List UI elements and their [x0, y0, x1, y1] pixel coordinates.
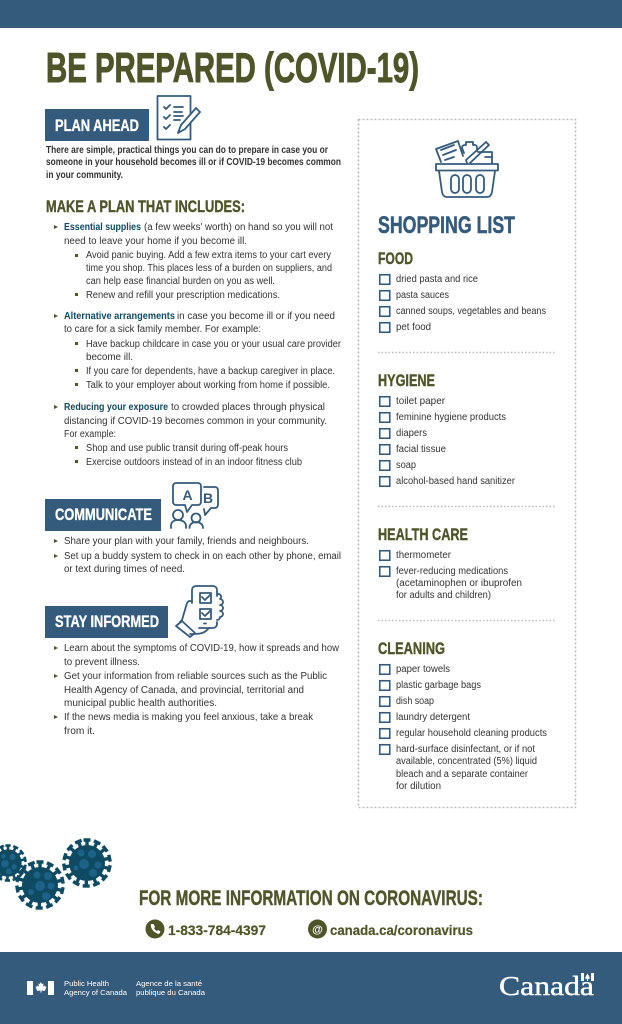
list: reducing your exposure: distancing if COVID-19 becomes common in your community.: [64, 416, 327, 427]
section: food: dried pasta and rice: [396, 274, 478, 285]
section: health care: [378, 525, 522, 601]
section: food: pet food: [396, 322, 431, 333]
heading: plan ahead: PLAN AHEAD: [55, 116, 139, 135]
icon: coronavirus particles: [0, 840, 110, 908]
section: cleaning: CLEANING: [378, 639, 445, 658]
list: communicate: Share your plan with your family, friends and neighbours.: [64, 536, 309, 547]
intro text: [46, 145, 341, 181]
logo: Canadian flag symbol: [27, 981, 54, 995]
list: essential supplies: [54, 222, 333, 301]
icon: hand holding phone: [176, 586, 223, 637]
section: cleaning: plastic garbage bags: [396, 680, 481, 691]
section: cleaning: laundry detergent: [396, 712, 470, 723]
section: food: [378, 249, 546, 333]
section: health care: (acetaminophen or ibuprofen: [396, 578, 522, 589]
list: stay informed: If the news media is making you feel anxious, take a break: [64, 712, 314, 723]
list: communicate: [54, 536, 341, 575]
icon: checklist and pencil: [158, 96, 200, 140]
list: stay informed: Get your information from reliable sources such as the Public: [64, 671, 327, 682]
intro text: in your community.: [46, 170, 123, 181]
section: cleaning: hard-surface disinfectant, or if not: [396, 744, 535, 755]
icon: two people talking: A: [182, 487, 193, 503]
panel: communicate: [45, 483, 341, 575]
list: reducing your exposure: [54, 402, 327, 468]
list: alternative arrangements: Have backup childcare in case you or your usual care provider: [86, 339, 342, 350]
list: alternative arrangements: Alternative arrangements: [64, 311, 175, 322]
section: health care: thermometer: [396, 550, 452, 561]
section: hygiene: diapers: [396, 428, 427, 439]
section: health care: HEALTH CARE: [378, 525, 468, 544]
list: communicate: or text during times of need.: [64, 564, 185, 575]
list: essential supplies: Renew and refill your prescription medications.: [86, 290, 280, 301]
section: cleaning: [378, 639, 547, 792]
list: essential supplies: time you shop. This places less of a burden on suppliers, and: [86, 263, 332, 274]
list: alternative arrangements: in case you become ill or if you need: [177, 311, 335, 322]
list: alternative arrangements: Talk to your employer about working from home if possible.: [86, 380, 330, 391]
section: hygiene: alcohol-based hand sanitizer: [396, 476, 516, 487]
section: health care: for adults and children): [396, 590, 491, 601]
heading: plan ahead: [45, 109, 149, 141]
heading: shopping list: SHOPPING LIST: [378, 212, 515, 239]
section: food: pasta sauces: [396, 290, 449, 301]
text: agency names: Agency of Canada: [64, 988, 128, 997]
intro text: There are simple, practical things you can do to prepare in case you or: [46, 145, 328, 156]
list: essential supplies: need to leave your home if you become ill.: [64, 236, 247, 247]
heading: communicate: COMMUNICATE: [55, 505, 152, 524]
text: agency names: publique du Canada: [136, 988, 206, 997]
top banner: [0, 0, 622, 28]
heading: make a plan: MAKE A PLAN THAT INCLUDES:: [46, 197, 245, 216]
section: food: FOOD: [378, 249, 413, 268]
section: food: canned soups, vegetables and beans: [396, 306, 546, 317]
icon: two people talking: B: [203, 490, 213, 506]
list: stay informed: [54, 643, 340, 737]
heading: communicate: [45, 499, 161, 531]
list: reducing your exposure: Exercise outdoors instead of in an indoor fitness club: [86, 457, 302, 468]
list: reducing your exposure: Shop and use public transit during off-peak hours: [86, 443, 288, 454]
contact: phone: 1-833-784-4397: [168, 922, 266, 938]
section: hygiene: facial tissue: [396, 444, 446, 455]
list: communicate: Set up a buddy system to check in on each other by phone, email: [64, 551, 341, 562]
list: alternative arrangements: If you care for dependents, have a backup caregiver in place.: [86, 366, 335, 377]
text: agency names: Public Health: [64, 979, 109, 988]
contact: website: canada.ca/coronavirus: [330, 922, 473, 938]
title: BE PREPARED (COVID-19): [46, 44, 419, 91]
list: alternative arrangements: to care for a sick family member. For example:: [64, 324, 261, 335]
logo: Canada wordmark: Canada: [499, 971, 594, 1001]
list: reducing your exposure: Reducing your exposure: [64, 402, 168, 413]
list: essential supplies: Essential supplies: [64, 222, 141, 233]
heading: stay informed: [45, 606, 168, 638]
list: stay informed: municipal public health authorities.: [64, 698, 217, 709]
panel: plan ahead: [45, 96, 341, 181]
list: reducing your exposure: For example:: [64, 429, 116, 440]
section: cleaning: paper towels: [396, 664, 450, 675]
panel: shopping list: [358, 120, 576, 808]
list: alternative arrangements: [54, 311, 342, 391]
section: hygiene: HYGIENE: [378, 371, 435, 390]
footer band: [0, 952, 622, 1024]
text: agency names: [64, 979, 206, 997]
section: health care: fever-reducing medications: [396, 566, 508, 577]
icon: two people talking: [171, 483, 218, 528]
section: cleaning: bleach and a separate container: [396, 769, 529, 780]
section: hygiene: soap: [396, 460, 416, 471]
list: stay informed: Learn about the symptoms of COVID-19, how it spreads and how: [64, 643, 340, 654]
section: hygiene: feminine hygiene products: [396, 412, 506, 423]
text: agency names: Agence de la santé: [136, 979, 202, 988]
section: cleaning: available, concentrated (5%) liquid: [396, 756, 537, 767]
section: cleaning: for dilution: [396, 781, 441, 792]
list: essential supplies: (a few weeks' worth) on hand so you will not: [144, 222, 333, 233]
section: cleaning: dish soap: [396, 696, 434, 707]
section: hygiene: toilet paper: [396, 396, 446, 407]
list: alternative arrangements: become ill.: [86, 352, 133, 363]
section: hygiene: [378, 371, 516, 487]
list: reducing your exposure: to crowded places through physical: [171, 402, 325, 413]
list: stay informed: from it.: [64, 726, 95, 737]
intro text: someone in your household becomes ill or if COVID-19 becomes common: [46, 157, 341, 168]
panel: stay informed: [45, 586, 340, 737]
contact: website: [308, 920, 473, 938]
contact: website: @: [312, 924, 323, 936]
list: stay informed: to prevent illness.: [64, 657, 140, 668]
icon: shopping basket: [436, 141, 498, 197]
contact: phone: [146, 920, 266, 938]
list: essential supplies: Avoid panic buying. Add a few extra items to your cart every: [86, 250, 331, 261]
heading: more information: FOR MORE INFORMATION ON CORONAVIRUS:: [139, 887, 483, 910]
list: essential supplies: can help ease financial burden on you as well.: [86, 276, 275, 287]
heading: stay informed: STAY INFORMED: [55, 612, 159, 631]
section: cleaning: regular household cleaning products: [396, 728, 547, 739]
list: stay informed: Health Agency of Canada, and provincial, territorial and: [64, 685, 304, 696]
